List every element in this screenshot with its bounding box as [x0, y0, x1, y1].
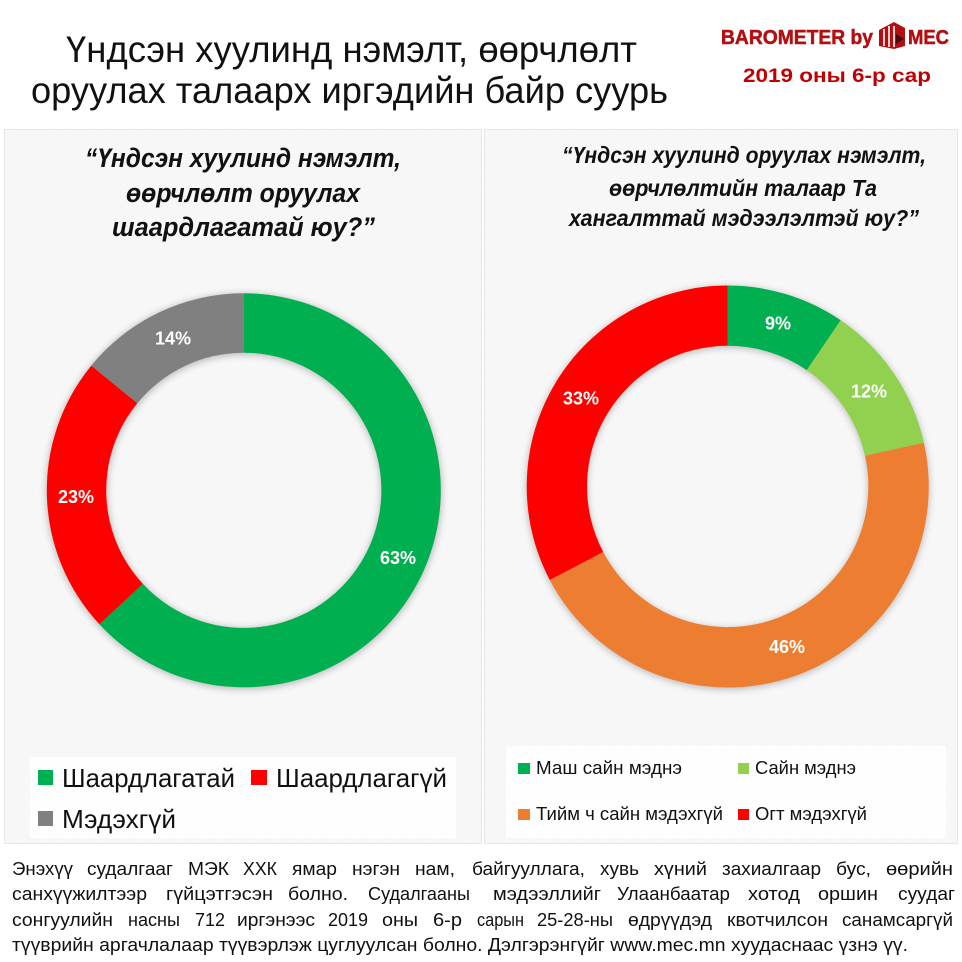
question heading left — [85, 143, 401, 242]
footer note: байгууллага, — [472, 859, 585, 879]
slice: 14% grey — [91, 293, 244, 403]
slice: 23% red — [47, 366, 143, 624]
slice: 33% red — [527, 286, 728, 580]
brand logo: BAROMETER by — [721, 27, 874, 49]
question heading right: хангалттай мэдээлэлтэй юу?” — [567, 205, 919, 231]
footer note: хүний — [654, 859, 707, 879]
donut chart right: 46% — [769, 637, 805, 657]
footer note: мэдээллийг — [493, 884, 601, 904]
date: 2019 оны 6-р сар — [743, 66, 931, 87]
donut chart left: 14% — [155, 328, 191, 348]
legend right: Огт мэдэхгүй — [755, 804, 867, 824]
title — [31, 29, 668, 111]
icon: MEC logo — [879, 22, 905, 49]
brand logo — [721, 22, 949, 49]
footer note: болно. — [288, 884, 348, 904]
donut chart left — [47, 293, 441, 687]
footer note: 2019 — [328, 910, 368, 930]
title: Үндсэн хуулинд нэмэлт, өөрчлөлт — [66, 29, 637, 70]
footer note: Энэхүү — [12, 859, 73, 879]
question heading left: “Үндсэн хуулинд нэмэлт, — [85, 143, 401, 173]
legend left — [30, 757, 456, 838]
panel: right survey question — [484, 130, 958, 844]
footer note: 712 — [195, 910, 225, 930]
footer note: ХХК — [243, 859, 278, 879]
legend right — [506, 746, 946, 838]
donut chart right: 33% — [563, 388, 599, 408]
question heading left: өөрчлөлт оруулах — [126, 178, 361, 208]
question heading right: “Үндсэн хуулинд оруулах нэмэлт, — [562, 142, 926, 168]
title: оруулах талаарх иргэдийн байр суурь — [31, 70, 668, 111]
footer note: нэгэн — [352, 859, 400, 879]
legend right: Сайн мэднэ — [755, 758, 856, 778]
donut chart left: 63% — [380, 548, 416, 568]
donut chart right: 9% — [765, 314, 791, 334]
donut chart left: 23% — [58, 487, 94, 507]
question heading right: өөрчлөлтийн талаар Та — [609, 175, 877, 201]
footer note: санамсаргүй — [842, 910, 953, 930]
footer note: квотчилсон — [727, 910, 828, 930]
footer note: 6-р — [433, 910, 462, 930]
donut chart right — [527, 286, 929, 688]
footer note: бус, — [836, 859, 871, 879]
footer note: өөрийн — [886, 859, 953, 879]
footer note: хувь — [600, 859, 639, 879]
brand logo: MEC — [908, 27, 949, 49]
donut chart right: 12% — [851, 382, 887, 402]
footer note: ямар — [292, 859, 337, 879]
footer note: насны — [128, 910, 180, 930]
footer note: гүйцэтгэсэн — [166, 884, 273, 904]
slice: 12% light green — [807, 320, 924, 456]
footer note: МЭК — [188, 859, 230, 879]
legend right: Тийм ч сайн мэдэхгүй — [536, 804, 723, 824]
footer note: 25-28-ны — [537, 910, 613, 930]
footer note: Судалгааны — [368, 884, 470, 904]
legend left: Шаардлагатай — [62, 763, 235, 793]
footer note: хотод — [748, 884, 801, 904]
slice: 9% green — [728, 286, 841, 370]
footer note: оны — [382, 910, 418, 930]
footer note: Улаанбаатар — [617, 884, 730, 904]
footer note — [12, 859, 955, 955]
footer note: судалгааг — [87, 859, 173, 879]
footer note: суудаг — [898, 884, 955, 904]
question heading right — [562, 142, 926, 231]
question heading left: шаардлагатай юу?” — [112, 212, 375, 242]
footer note: нам, — [415, 859, 455, 879]
footer note: санхүүжилтээр — [12, 884, 147, 904]
footer note: түүврийн аргачлалаар түүвэрлэж цуглуулсан болно. Дэлгэрэнгүйг www.mec.mn хуудаснаас үзнэ үү. — [12, 935, 908, 955]
slice: 46% orange — [550, 443, 929, 688]
legend right: Маш сайн мэднэ — [536, 758, 682, 778]
footer note: иргэнээс — [237, 910, 315, 930]
footer note: өдрүүдэд — [628, 910, 713, 930]
footer note: оршин — [818, 884, 878, 904]
footer note: сонгуулийн — [12, 910, 113, 930]
slice: 63% green — [99, 293, 441, 687]
panel: left survey question — [4, 130, 482, 844]
legend left: Мэдэхгүй — [62, 804, 176, 834]
footer note: сарын — [477, 910, 524, 930]
footer note: захиалгаар — [722, 859, 821, 879]
legend left: Шаардлагагүй — [276, 763, 447, 793]
